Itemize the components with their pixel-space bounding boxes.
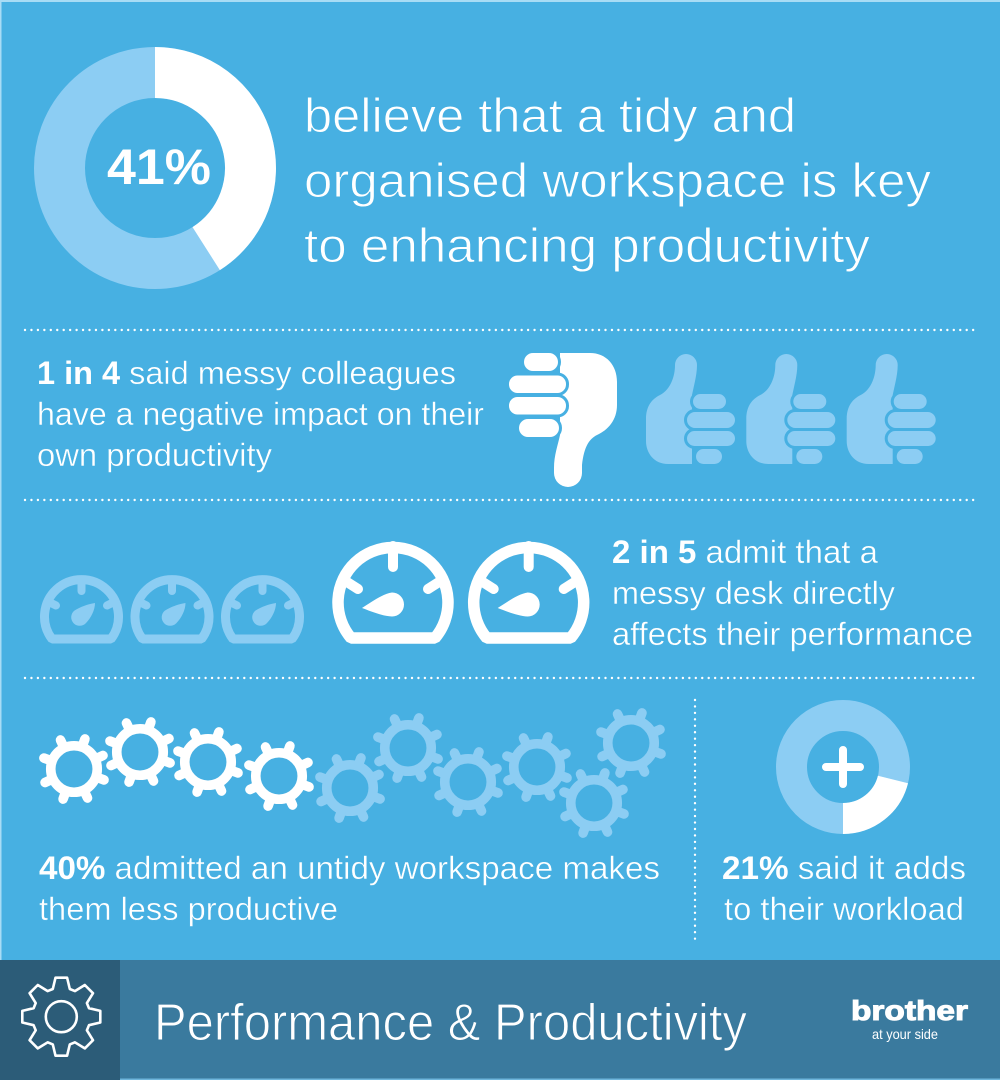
icons: four white gears (44, 722, 309, 806)
panel: 40 percent less productive (39, 713, 661, 927)
text: 2 in 5: 2 in 5 admit that a (612, 534, 878, 570)
donut chart: 21% (792, 716, 894, 818)
icons: two white gauges (338, 546, 584, 638)
text: 2 in 5 (612, 534, 973, 652)
headline text: organised workspace is key (304, 155, 931, 208)
text: 1 in 4: own productivity (37, 437, 272, 473)
headline text (304, 90, 931, 273)
icon: thumb down (508, 352, 617, 487)
text: 1 in 4: have a negative impact on their (37, 396, 484, 432)
text: 1 in 4: 1 in 4 said messy colleagues (37, 355, 456, 391)
icon: gear outline (22, 978, 100, 1056)
headline text: to enhancing productivity (304, 220, 870, 273)
text: 40% (39, 850, 660, 927)
donut value: 41% (107, 139, 211, 195)
icons: three thumbs up (646, 354, 937, 466)
panel: 2 in 5 performance (45, 534, 973, 652)
text: 40%: 40% admitted an untidy workspace makes (39, 850, 660, 886)
text: 2 in 5: affects their performance (612, 616, 973, 652)
text: 21% (722, 850, 966, 927)
text: 2 in 5: messy desk directly (612, 575, 895, 611)
footer icon tile (0, 960, 120, 1080)
headline text: believe that a tidy and (304, 90, 796, 143)
footer band (0, 960, 1000, 1080)
icon: plus (826, 750, 860, 784)
logo: brother: at your side (872, 1026, 938, 1042)
logo: brother (851, 995, 968, 1042)
text: 21%: to their workload (724, 891, 964, 927)
panel: 1 in 4 colleagues (37, 352, 937, 487)
text: 1 in 4 (37, 355, 484, 473)
icons: six pale gears (320, 713, 661, 833)
text: 21%: 21% said it adds (722, 850, 966, 886)
text: 40%: them less productive (39, 891, 338, 927)
panel: 21 percent workload (722, 716, 966, 927)
logo: brother: brother (851, 995, 968, 1026)
donut chart: 41% (60, 72, 250, 264)
panel: 41 percent headline (60, 72, 931, 273)
icons: three pale gauges (45, 580, 300, 639)
footer title: Performance & Productivity (154, 994, 747, 1052)
